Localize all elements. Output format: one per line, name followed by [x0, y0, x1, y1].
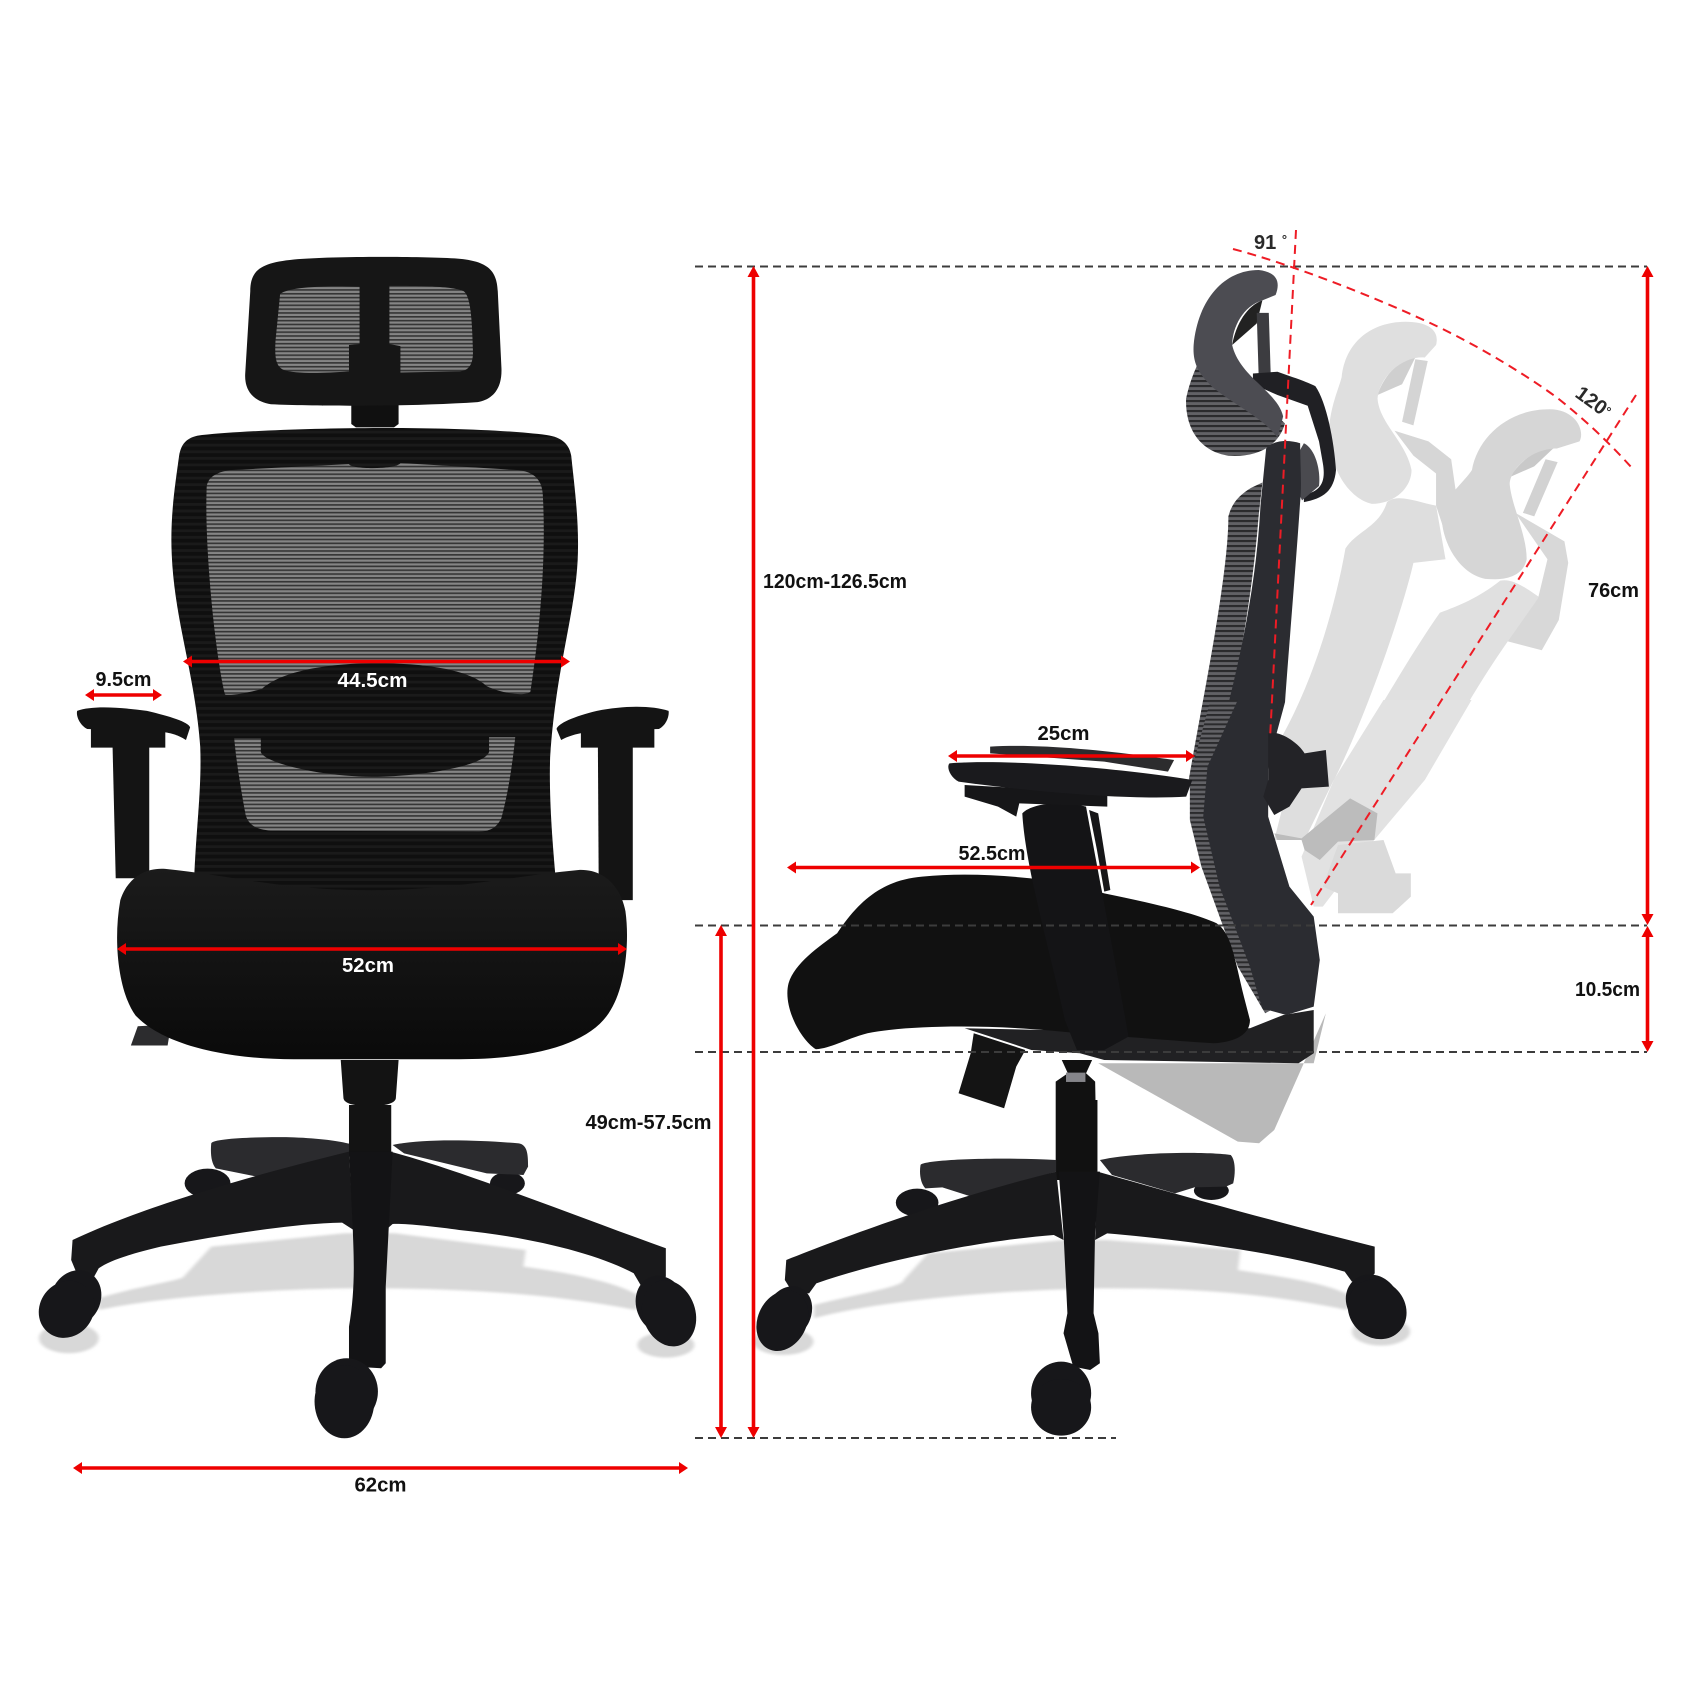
ghost seat underside	[1098, 1013, 1326, 1143]
label: 120 degree angle: °	[1601, 403, 1614, 419]
backrest upper mesh	[206, 463, 544, 695]
side base	[750, 1100, 1412, 1436]
arrow: armrest length	[948, 750, 1195, 762]
arrow: back height	[1642, 266, 1654, 925]
arrow: overall height	[748, 266, 760, 1438]
side front right leg	[1095, 1172, 1375, 1282]
headrest cushion	[1194, 270, 1283, 438]
gas cylinder	[341, 1060, 399, 1157]
side column	[1056, 1060, 1097, 1180]
label: overall height: 120cm-126.5cm	[763, 571, 907, 593]
side seat and arm	[787, 700, 1329, 1180]
side front casters	[750, 1272, 1412, 1436]
front view chair	[34, 257, 702, 1438]
front base	[34, 1060, 702, 1438]
back top block	[1289, 443, 1319, 500]
back lower mesh	[1190, 700, 1274, 1013]
ghost headrest wedge one	[1378, 357, 1415, 395]
headrest inner wedge	[1232, 300, 1262, 345]
shadow: front chair	[39, 1233, 694, 1358]
backrest	[171, 428, 578, 892]
label: back width: 44.5cm	[338, 670, 408, 692]
headrest mesh	[275, 286, 473, 373]
rear legs	[211, 1137, 528, 1177]
ghost back one lower	[1274, 700, 1365, 840]
label: 91 degree angle: °	[1282, 232, 1287, 247]
headrest	[245, 257, 501, 406]
ghost chair lower positions	[1098, 700, 1472, 1143]
front right leg	[386, 1152, 666, 1285]
left armrest	[77, 707, 190, 878]
side front left leg	[785, 1172, 1064, 1293]
reclined ghost chairs	[1098, 322, 1581, 1143]
ghost back two	[1334, 580, 1542, 780]
ghost back two lower	[1302, 700, 1472, 907]
seat lever	[131, 1025, 170, 1045]
backrest lower mesh	[234, 737, 515, 832]
arrow: seat depth	[787, 862, 1200, 874]
ghost stem two	[1523, 459, 1558, 516]
side rear legs	[920, 1153, 1235, 1197]
side back frame upper	[1210, 441, 1301, 780]
tension knob	[959, 1033, 1025, 1108]
rear casters	[185, 1169, 525, 1198]
ghost chair upper positions	[1281, 322, 1581, 780]
arm rear bar	[1089, 810, 1110, 892]
ghost cushion one	[1328, 322, 1437, 504]
side seat cushion	[787, 875, 1250, 1049]
center leg	[349, 1152, 393, 1368]
headrest bracket	[1253, 372, 1336, 502]
dashed reference lines	[695, 266, 1647, 1438]
arm pad upper	[990, 746, 1174, 772]
arm post	[1022, 803, 1129, 1050]
label: base width: 62cm	[354, 1474, 406, 1496]
ghost stem one	[1402, 359, 1428, 425]
front casters	[34, 1268, 702, 1438]
seat cushion	[117, 869, 627, 1059]
headrest stem	[1257, 313, 1271, 374]
side back mesh	[1189, 482, 1262, 780]
front left leg	[71, 1152, 354, 1277]
label: armrest length: 25cm	[1038, 723, 1090, 745]
shadow: side chair	[753, 1240, 1410, 1355]
ghost cushion two	[1442, 409, 1581, 579]
label: seat width: 52cm	[342, 955, 394, 977]
label: 120 degree angle: 120	[1571, 382, 1611, 420]
ghost knob two	[1323, 840, 1411, 913]
arm pad	[948, 762, 1192, 798]
front headrest and back	[77, 257, 669, 1059]
back lower frame	[1203, 700, 1320, 1015]
headrest neck	[351, 398, 399, 427]
side column lower	[1056, 1100, 1097, 1172]
label: armrest width: 9.5cm	[96, 669, 152, 691]
arrow: base width	[73, 1462, 688, 1474]
ghost bracket two	[1508, 513, 1568, 650]
label: back height: 76cm	[1588, 580, 1639, 602]
ghost back one	[1281, 498, 1446, 780]
side rear casters	[896, 1181, 1229, 1217]
label: seat depth: 52.5cm	[958, 843, 1026, 865]
side view chair	[750, 270, 1412, 1436]
lumbar knob	[1263, 733, 1329, 815]
arrow: armrest width	[85, 689, 162, 701]
arm support	[965, 785, 1107, 817]
under seat mechanism	[965, 1010, 1314, 1063]
column chrome	[1066, 1073, 1085, 1082]
ghost bracket one	[1395, 431, 1457, 534]
headrest mesh back	[1186, 356, 1285, 456]
right armrest	[557, 707, 669, 900]
side headrest	[1186, 270, 1336, 780]
arrow: seat height	[715, 925, 727, 1438]
recline angle guides	[1233, 230, 1636, 905]
label: 91 degree angle: 91	[1254, 232, 1276, 254]
arrow: seat width	[117, 943, 627, 955]
arrow: headrest to seat offset	[1642, 926, 1654, 1052]
ghost headrest wedge two	[1510, 447, 1555, 477]
label: seat height: 49cm-57.5cm	[586, 1112, 712, 1134]
ghost knob one	[1274, 798, 1377, 860]
arrow: back width	[183, 656, 570, 668]
label: offset: 10.5cm	[1575, 979, 1640, 1001]
side center leg	[1059, 1172, 1100, 1370]
